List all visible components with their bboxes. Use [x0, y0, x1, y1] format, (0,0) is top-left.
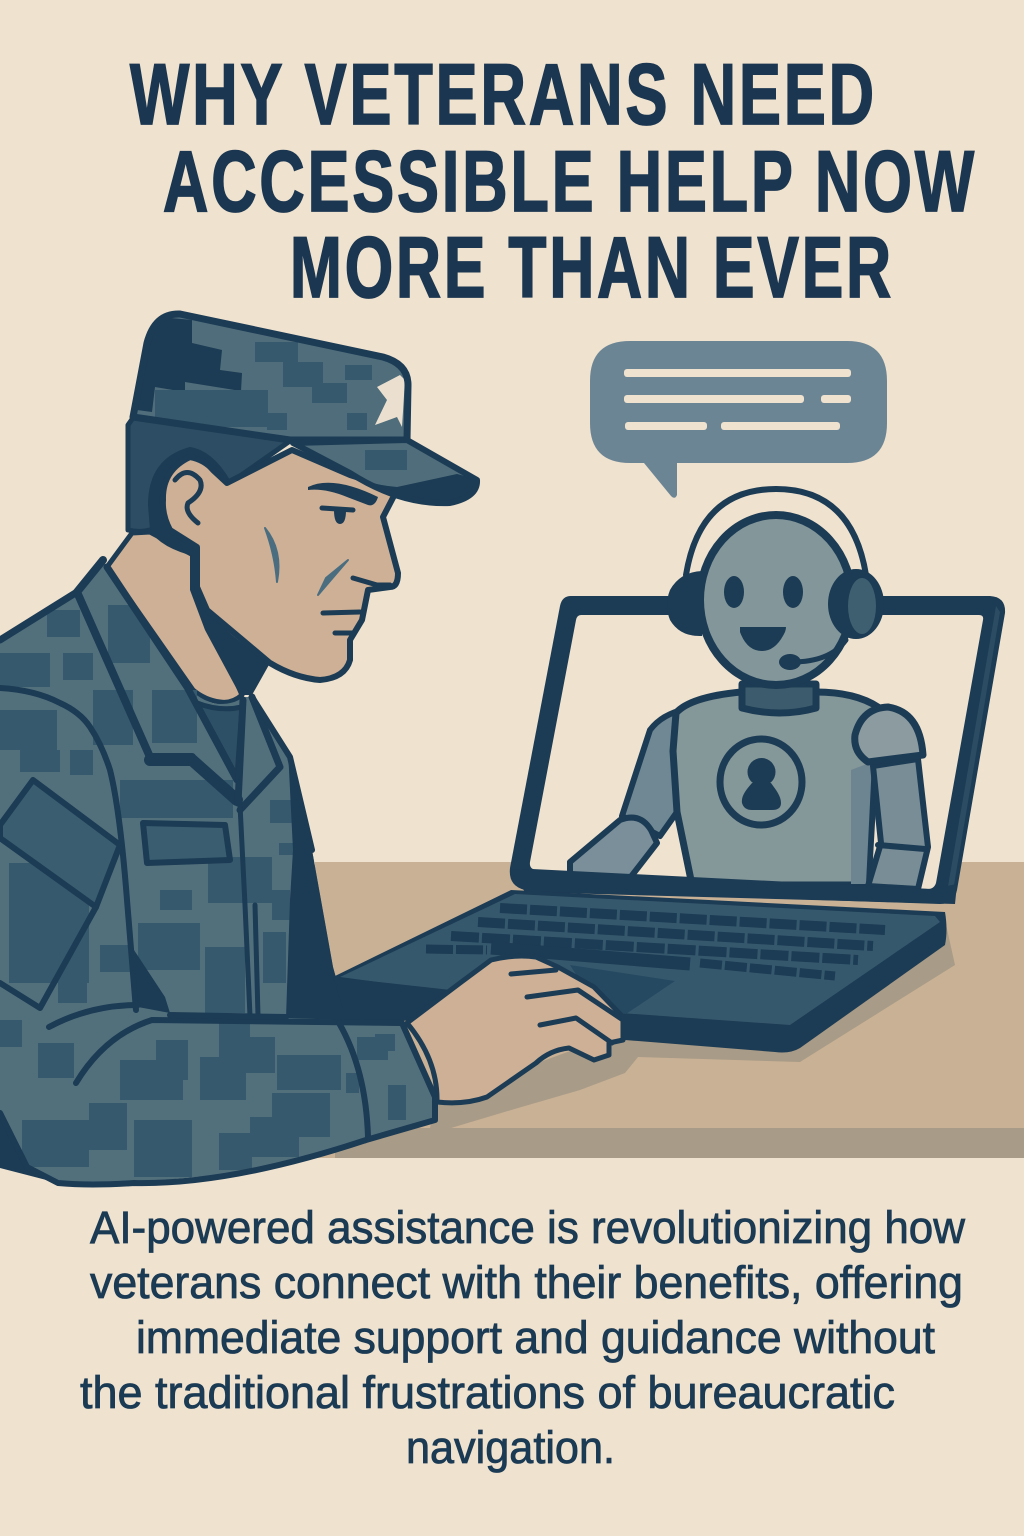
- soldier face: [163, 450, 398, 680]
- underside of laptop near arm: [333, 977, 451, 1025]
- soldier placket: [240, 805, 258, 1016]
- soldier torso shadow: [286, 750, 348, 1020]
- robot ear cups: [667, 569, 884, 639]
- soldier ear surround: [148, 447, 230, 557]
- robot microphone: [779, 640, 846, 670]
- body text: veterans connect with their benefits, offering: [90, 1257, 963, 1308]
- cap star: [375, 375, 405, 427]
- robot torso: [673, 692, 878, 885]
- soldier hand: [407, 956, 623, 1103]
- soldier jacket: [0, 560, 435, 1183]
- laptop bottom bezel: [510, 869, 957, 904]
- soldier jaw shadow: [190, 548, 270, 695]
- laptop base: [333, 890, 946, 1052]
- soldier right torso edge: [252, 697, 312, 850]
- soldier collar: [77, 560, 280, 810]
- robot face: [724, 576, 803, 651]
- soldier cuff: [339, 1023, 368, 1137]
- soldier ear: [175, 472, 201, 523]
- laptop: [333, 489, 1005, 1052]
- title: [130, 47, 977, 316]
- cap visor: [293, 440, 477, 503]
- laptop deck: [340, 894, 940, 1025]
- soldier sleeve seam: [0, 688, 136, 1010]
- robot neck: [742, 684, 816, 713]
- robot: [570, 489, 928, 889]
- body text: [80, 1202, 965, 1473]
- body text: navigation.: [406, 1422, 615, 1473]
- soldier undershirt: [197, 703, 242, 777]
- body text: immediate support and guidance without: [136, 1312, 935, 1363]
- keyboard: [426, 908, 885, 976]
- soldier name tape: [143, 823, 230, 863]
- speech bubble: [590, 341, 887, 498]
- soldier brow and eye: [308, 483, 378, 505]
- robot headset band: [686, 489, 866, 575]
- soldier neck: [107, 532, 242, 702]
- trackpad: [570, 965, 675, 1014]
- soldier hair: [128, 415, 290, 557]
- soldier shoulder patch: [0, 780, 120, 1008]
- robot head: [700, 515, 852, 685]
- soldier: [0, 314, 623, 1184]
- robot right arm: [868, 759, 928, 889]
- soldier cheek creases: [265, 528, 348, 595]
- soldier forearm outline: [0, 1005, 435, 1184]
- body text: the traditional frustrations of bureaucratic: [80, 1367, 895, 1418]
- laptop screen frame: [510, 596, 1005, 904]
- body text: AI-powered assistance is revolutionizing how: [90, 1202, 965, 1253]
- robot chest emblem: [720, 739, 802, 825]
- desk: [315, 862, 1024, 1158]
- soldier cap: [133, 314, 480, 510]
- soldier nose and mouth: [323, 578, 390, 633]
- robot left arm: [622, 709, 686, 836]
